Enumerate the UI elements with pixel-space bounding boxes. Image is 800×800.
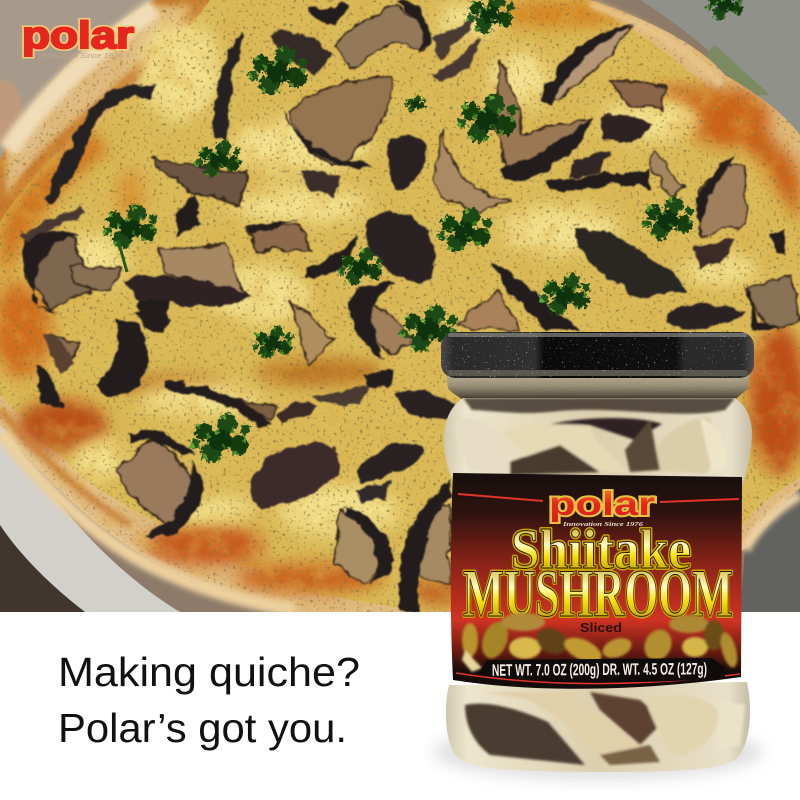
plate left [0,420,180,612]
red rule bottom [456,673,740,684]
plate bottom right [740,490,800,612]
plate top right [640,0,800,150]
logo: polar top left: Innovation Since 1976 [38,53,123,60]
jar cap [441,332,754,378]
dark herb specks [0,0,800,612]
red rule right [660,499,739,502]
headline [58,649,360,751]
headline: Making quiche? [58,649,360,695]
browned rim blobs [0,0,800,606]
parsley stem [118,240,127,272]
upper mushrooms [455,418,726,475]
crust highlights [0,4,800,610]
jar soft shadow [433,724,763,780]
logo: polar top left: polar [22,15,134,57]
filling base [0,0,800,612]
table bottom left [0,525,85,612]
mushroom slices: brown [25,5,800,585]
net weight band [478,658,725,682]
Shiitake title: Shiitake [511,519,691,581]
label logo: polar [549,485,655,522]
jar body upper [444,398,752,484]
mushroom on table [0,80,23,144]
red rule left [458,494,543,501]
browned crust inner band [0,0,205,215]
label logo [549,485,655,528]
product label [451,473,742,689]
mottled browning [0,0,800,612]
logo: polar top left: polar [22,15,134,57]
cheese highlights [50,4,756,536]
lower mushrooms [465,692,745,765]
table top left [0,0,170,160]
dark shadow below neck [463,398,735,414]
parsley sprigs [102,0,744,462]
mushroom illustrations [462,613,740,672]
wooden table [0,0,800,612]
photo: mushroom quiche [0,0,800,612]
label logo: Innovation Since 1976 [562,521,644,528]
glass neck [446,372,750,400]
crust [0,0,800,612]
product jar [441,332,754,772]
Shiitake title: Shiitake [511,519,691,581]
headline: Polar’s got you. [58,705,347,751]
green tint plate edge [705,45,770,95]
Sliced subtitle: Sliced [580,621,622,635]
mushroom slices: dark [20,0,785,612]
jar body lower [446,682,750,772]
